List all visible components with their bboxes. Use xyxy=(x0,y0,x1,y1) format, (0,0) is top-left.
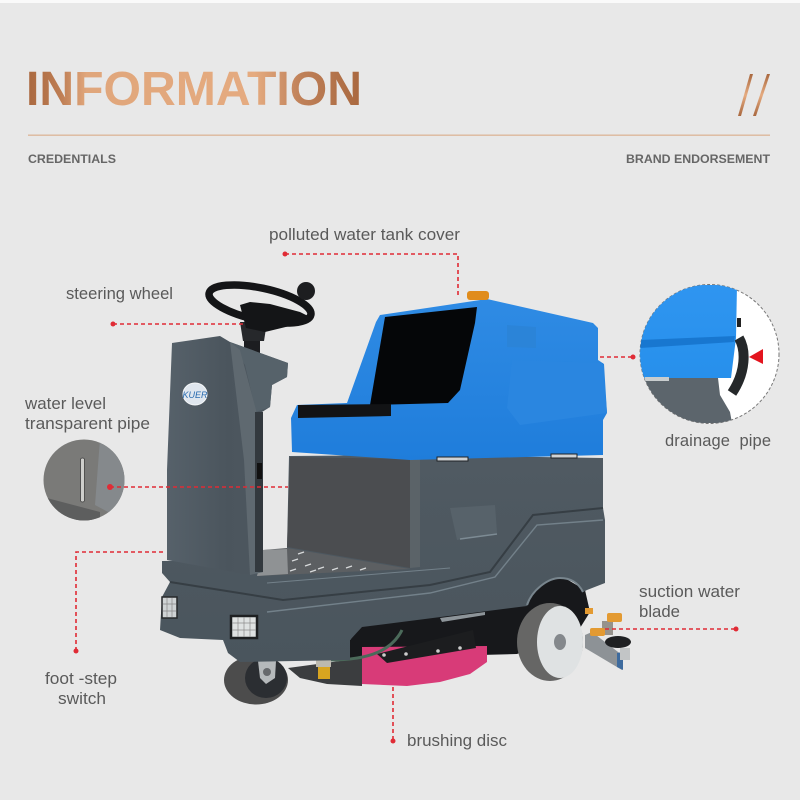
body contour lines xyxy=(170,508,603,612)
squeegee assembly xyxy=(585,608,631,670)
label: water level transparent pipe: water level xyxy=(24,395,106,413)
beacon light xyxy=(467,291,489,300)
label: foot step switch: switch xyxy=(58,690,106,708)
label: water level transparent pipe: transparent pipe xyxy=(25,415,150,433)
left headlight xyxy=(162,597,177,618)
label: brushing disc: brushing disc xyxy=(407,732,507,750)
label: foot step switch xyxy=(45,670,117,708)
label: polluted water tank cover: polluted water tank cover xyxy=(269,226,461,244)
front headlight xyxy=(231,616,257,638)
control tower xyxy=(167,336,288,575)
brush cover plate xyxy=(377,630,476,663)
steering column xyxy=(240,322,267,355)
blue top shell xyxy=(291,299,607,460)
label: steering wheel: steering wheel xyxy=(66,285,173,303)
leader: foot step switch xyxy=(74,552,163,654)
floor plate xyxy=(257,548,410,576)
logo badge: KUER xyxy=(182,390,208,400)
brass fittings xyxy=(316,659,331,679)
latch hinges xyxy=(437,454,577,461)
detail circle: water level pipe xyxy=(43,439,125,521)
leader: suction water blade xyxy=(605,626,738,632)
label: water level transparent pipe xyxy=(24,395,150,433)
side panel highlight xyxy=(410,459,420,568)
logo badge xyxy=(182,383,208,405)
subheading: credentials: CREDENTIALS xyxy=(28,152,116,166)
undercarriage xyxy=(345,574,590,668)
detail circle: drainage pipe xyxy=(640,284,779,424)
leader: drainage pipe xyxy=(600,354,636,360)
label: foot step switch: foot -step xyxy=(45,670,117,688)
leader: polluted water tank cover xyxy=(282,252,458,297)
main body and base xyxy=(160,455,605,662)
rear wheel xyxy=(517,603,583,681)
label: suction water blade xyxy=(639,583,741,621)
label: drainage pipe: drainage pipe xyxy=(665,432,771,450)
red arrow xyxy=(749,349,763,364)
recessed rear panel xyxy=(287,457,410,568)
seat strip xyxy=(298,404,391,418)
caster wheel xyxy=(224,656,288,704)
icon: double slash xyxy=(738,74,770,116)
brushing disc xyxy=(362,646,487,686)
silver guard xyxy=(440,612,485,622)
side emboss xyxy=(450,505,497,540)
brush bristles xyxy=(288,658,362,686)
leader: steering wheel xyxy=(110,322,245,326)
steering wheel xyxy=(206,278,315,332)
water hose xyxy=(330,630,402,660)
leader: water level pipe xyxy=(107,484,288,490)
label: suction water blade: blade xyxy=(639,603,680,621)
moulded panel on shell xyxy=(507,325,607,425)
leader: brushing disc xyxy=(390,687,396,744)
scrubber machine illustration xyxy=(160,278,631,704)
label: suction water blade: suction water xyxy=(639,583,741,601)
title: INFORMATION xyxy=(26,63,362,116)
subheading: brand endorsement: BRAND ENDORSEMENT xyxy=(626,152,771,166)
seat window black panel xyxy=(370,307,477,405)
